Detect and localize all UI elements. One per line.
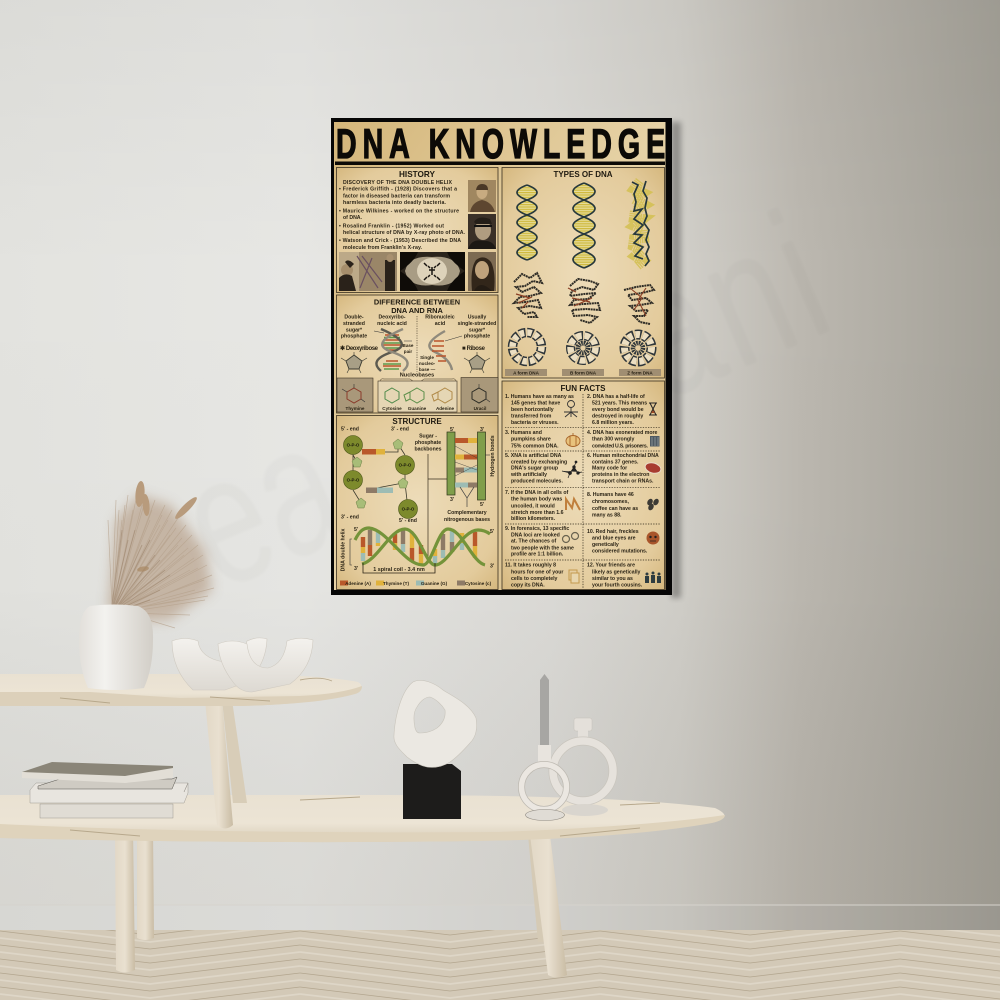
label: B form DNA <box>562 369 604 376</box>
icon: coiled DNA <box>566 499 580 510</box>
cytosine guanine adenine box <box>378 381 457 412</box>
pampas grass <box>108 481 214 628</box>
fact 11 <box>505 563 563 589</box>
fact 12: similar to you as <box>592 576 633 582</box>
fact 1 <box>505 394 574 426</box>
end labels: 5' - end <box>341 426 359 432</box>
baseboard <box>0 904 1000 931</box>
fact 1: 145 genes that have <box>511 400 560 406</box>
callout: single nucleobase: base — <box>419 367 436 372</box>
double helix label <box>340 527 494 572</box>
bases on chain <box>362 449 393 493</box>
panel: types of DNA <box>502 168 664 378</box>
phosphate circles <box>344 436 418 518</box>
fact 5: created by exchanging <box>511 459 567 465</box>
complementary base ladder: 5' <box>480 502 484 508</box>
watermark text: ani <box>599 172 859 438</box>
deoxyribose ring <box>341 352 367 373</box>
complementary base ladder: 3' <box>450 497 454 503</box>
cytosine guanine adenine box: Cytosine <box>382 406 402 411</box>
fact 10: 10. Red hair, freckles <box>587 529 639 535</box>
icon: meat <box>644 461 662 475</box>
large ring holder <box>553 718 613 816</box>
fact 12 <box>587 563 643 589</box>
DNA labels: phosphate <box>341 334 367 340</box>
fact 2 <box>587 394 647 426</box>
photo: Franklin <box>468 252 496 291</box>
title: DNA KNOWLEDGE <box>336 119 665 167</box>
title rule <box>335 162 665 165</box>
callout: single nucleobase: Single <box>420 355 434 360</box>
icon: handcuffs <box>562 532 578 542</box>
RNA labels: phosphate <box>464 334 490 340</box>
icon: virus <box>564 400 578 417</box>
fact 5: DNA's sugar group <box>511 466 558 472</box>
fact 3: 3. Humans and <box>505 430 542 436</box>
fact 1: 1. Humans have as many as <box>505 394 574 400</box>
phosphate text <box>347 443 415 512</box>
fact 9: at. The chances of <box>511 539 557 545</box>
helix: A form <box>517 185 537 260</box>
legend: Thymine (T) <box>383 581 409 586</box>
fact 12: your fourth cousins. <box>592 583 643 589</box>
helix: B form <box>573 183 595 268</box>
fact 2: 521 years. This means <box>592 400 647 406</box>
spiral coil measure <box>363 563 435 573</box>
fact 5: produced molecules. <box>511 478 563 484</box>
photo: Watson and Crick <box>339 252 397 291</box>
complementary nitrogenous bases label: Complementary <box>447 510 487 516</box>
fact 3: pumpkins share <box>511 437 551 443</box>
fact 4 <box>587 430 658 449</box>
fact 1: bacteria or viruses. <box>511 420 559 426</box>
fact 3 <box>505 430 559 449</box>
complementary base ladder: 5' <box>450 427 454 433</box>
complementary base ladder: 3' <box>480 427 484 433</box>
fact 7: the human body was <box>511 497 562 503</box>
double helix label: 5' <box>354 527 358 533</box>
label: B form DNA: B form DNA <box>570 371 597 376</box>
divider <box>416 316 418 372</box>
legend: Adenine (A) <box>345 581 371 586</box>
RNA strand diagram <box>429 331 462 370</box>
poster <box>331 118 681 598</box>
fact 10 <box>587 529 648 555</box>
double helix label: DNA double helix <box>340 529 346 571</box>
cytosine guanine adenine box: Adenine <box>436 406 455 411</box>
DNA labels: Double- <box>344 315 364 321</box>
icon: face <box>646 532 660 544</box>
heading: types of DNA: TYPES OF DNA <box>553 170 613 179</box>
upper table legs <box>205 700 247 828</box>
fact 10: genetically <box>592 542 619 548</box>
sugar-phosphate backbones label <box>414 434 442 452</box>
small ring holder <box>522 745 566 820</box>
RNA labels: single-stranded <box>458 321 496 327</box>
sugar-phosphate backbones label: Sugar - <box>419 434 437 440</box>
history text block: harmless bacteria into deadly bacteria. <box>343 200 447 206</box>
DNA labels: Deoxyribo- <box>378 315 406 321</box>
double helix label: 3' <box>490 564 494 570</box>
fact 12: 12. Your friends are <box>587 563 635 569</box>
hydrogen bonds label <box>485 435 496 477</box>
fact 6: proteins in the electron <box>592 472 649 478</box>
uracil box <box>461 378 498 412</box>
fact 11: 11. It takes roughly 8 <box>505 563 556 569</box>
dotted dividers <box>505 394 661 589</box>
fact 6: Many code for <box>592 466 627 472</box>
end labels: 3' - end <box>391 426 409 432</box>
top view ring: B form <box>570 336 596 360</box>
DNA labels: stranded <box>343 321 365 327</box>
heading: nucleobases <box>380 372 456 384</box>
uracil box: Uracil <box>474 406 486 411</box>
callout: base pair <box>403 343 414 354</box>
DNA helix diagram <box>374 329 412 371</box>
history text block: • Rosalind Franklin - (1952) Worked out <box>339 223 444 229</box>
label: Z form DNA <box>619 369 661 376</box>
fact 7 <box>505 490 568 522</box>
RNA labels: Ribonucleic <box>425 315 455 321</box>
callout: single nucleobase <box>419 355 436 372</box>
label: deoxyribose: ✱ Deoxyribose <box>340 345 379 352</box>
heading: history: HISTORY <box>399 170 436 179</box>
cytosine guanine adenine box: Guanine <box>408 406 427 411</box>
legend <box>340 580 492 586</box>
icon: paper <box>569 570 579 583</box>
fact 11: hours for one of your <box>511 569 563 575</box>
atom model: A form <box>514 273 542 317</box>
fact 5: with artificially <box>510 472 547 478</box>
history text block <box>339 180 466 251</box>
end labels: 3' - end <box>341 514 359 520</box>
phosphate text: O-P-O <box>399 463 412 468</box>
double helix label: 3' <box>354 566 358 572</box>
fact 9: two people with the same <box>511 545 574 551</box>
end labels <box>341 426 417 524</box>
end labels: 5' - end <box>399 518 417 524</box>
fact 1: transferred from <box>511 414 552 420</box>
stack of books <box>22 762 188 818</box>
fact 7: 7. If the DNA in all cells of <box>505 490 568 496</box>
strands <box>355 528 490 565</box>
sugar pentagons <box>352 439 408 508</box>
fact 8: coffee can have as <box>592 506 638 512</box>
helix: Z form <box>632 181 649 266</box>
fact 2: destroyed in roughly <box>592 414 643 420</box>
spiral coil measure: 1 spiral coil - 3.4 nm <box>373 567 425 573</box>
panel: structure <box>336 416 498 590</box>
complementary nitrogenous bases label <box>444 487 490 523</box>
RNA labels: sugar* <box>469 328 486 334</box>
history text block: of DNA. <box>343 215 363 221</box>
nucleotide chain diagram <box>344 436 418 518</box>
history text block: factor in diseased bacteria can transform <box>343 193 450 199</box>
history text block: molecule from Franklin's X-ray. <box>343 245 423 251</box>
panel: history <box>336 168 498 292</box>
fact 4: than 300 wrongly <box>592 437 634 443</box>
sugar-phosphate backbones label: backbones <box>414 446 442 452</box>
callout: base pair: pair <box>404 349 412 354</box>
herringbone floor <box>0 930 1000 1000</box>
history text block: helical structure of DNA by X-ray photo of DNA. <box>343 230 466 236</box>
photo: X-ray diffraction <box>400 252 465 291</box>
heading: fun facts: FUN FACTS <box>561 384 606 393</box>
poster paper <box>334 122 666 590</box>
RNA labels: acid <box>435 321 445 327</box>
thymine box: Thymine <box>346 406 365 411</box>
fact 10: considered mutations. <box>592 549 648 555</box>
hydrogen bonds label: Hydrogen bonds <box>490 435 496 477</box>
complementary nitrogenous bases label: nitrogenous bases <box>444 517 490 523</box>
lower table top <box>0 795 725 842</box>
callout: base pair: Base <box>403 343 414 348</box>
label: A form DNA: A form DNA <box>513 371 540 376</box>
fact 7: stretch more than 1.6 <box>511 510 564 516</box>
heading: difference: DNA AND RNA <box>391 306 443 315</box>
thymine box <box>337 378 373 412</box>
ribose ring <box>464 352 490 373</box>
panel: fun facts <box>502 381 664 590</box>
fact 4: 4. DNA has exonerated more <box>587 430 658 436</box>
fact 4: convicted U.S. prisoners. <box>592 443 649 449</box>
phosphate text: O-P-O <box>402 507 415 512</box>
fact 12: likely as genetically <box>592 569 641 575</box>
phosphate text: O-P-O <box>347 478 360 483</box>
upper table top <box>0 674 362 706</box>
fact 9: DNA loci are looked <box>511 532 560 538</box>
heading: difference: DIFFERENCE BETWEEN <box>374 298 460 306</box>
watermark text: ea <box>153 381 370 629</box>
history text block: • Maurice Wilkines - worked on the structure <box>339 208 459 214</box>
fact 6: 6. Human mitochondrial DNA <box>587 453 659 459</box>
atom model: B form <box>568 279 600 323</box>
RNA labels <box>425 315 496 340</box>
icon: molecule <box>562 461 582 478</box>
fact 9 <box>505 526 574 558</box>
fact 6: contains 37 genes. <box>592 459 639 465</box>
history text block: • Watson and Crick - (1953) Described the DNA <box>339 238 461 244</box>
history text block: DISCOVERY OF THE DNA DOUBLE HELIX <box>343 180 453 186</box>
bowl: front U shape <box>218 638 313 692</box>
fact 8: many as 88. <box>592 513 622 519</box>
fact 9: profile are 1:1 billion. <box>511 552 564 558</box>
panel: difference between DNA and RNA <box>336 295 498 413</box>
fact 5 <box>505 453 567 484</box>
fact 10: and blue eyes are <box>592 535 636 541</box>
icon: coffee beans <box>646 498 660 511</box>
black cube <box>403 764 461 819</box>
atom model: Z form <box>624 285 654 324</box>
fact 11: cells to completely <box>511 576 558 582</box>
fact 6: transport chain or RNAs. <box>592 478 654 484</box>
icon: pumpkin <box>566 433 580 446</box>
legend: Cytosine (c) <box>465 581 492 586</box>
fact 7: billion kilometers. <box>511 516 556 522</box>
RNA labels: Usually <box>468 315 486 321</box>
label: ribose: ■ Ribose <box>462 346 486 352</box>
candle <box>540 674 549 745</box>
label: Z form DNA: Z form DNA <box>627 371 653 376</box>
fact 3: 75% common DNA. <box>511 443 559 449</box>
icon: hourglass <box>649 403 657 415</box>
top view ring: A form <box>512 332 542 362</box>
watermark text <box>153 172 859 629</box>
DNA labels: sugar* <box>346 328 363 334</box>
heading: nucleobases: Nucleobases <box>400 372 434 378</box>
DNA labels <box>341 315 407 340</box>
fact 6 <box>587 453 659 484</box>
poster shadow <box>671 122 681 598</box>
fact 11: copy its DNA. <box>511 583 545 589</box>
fact 8 <box>587 492 638 519</box>
fact 2: every bond would be <box>592 407 644 413</box>
heading: difference <box>374 298 460 315</box>
backbone pointer lines <box>428 454 448 559</box>
complementary base ladder <box>447 427 486 508</box>
sculpture <box>394 680 477 767</box>
label: A form DNA <box>505 369 547 376</box>
history text block: • Frederick Griffith - (1928) Discovers that a <box>339 186 457 192</box>
legend: Guanine (G) <box>421 581 448 586</box>
DNA labels: nucleic acid <box>377 321 407 327</box>
bowl: back U shape <box>172 638 267 690</box>
fact 2: 2. DNA has a half-life of <box>587 394 645 400</box>
fact 2: 6.8 million years. <box>592 420 634 426</box>
vase <box>79 604 153 690</box>
double helix label: 5' <box>490 529 494 535</box>
fact 5: 5. XNA is artificial DNA <box>505 453 562 459</box>
fact 7: uncoiled, it would <box>511 503 555 509</box>
top view ring: Z form <box>624 334 652 362</box>
lower table legs <box>115 830 567 978</box>
phosphate text: O-P-O <box>347 443 360 448</box>
icon: prison <box>650 436 660 446</box>
fact 8: chromosomes, <box>592 499 629 505</box>
callout: single nucleobase: nucleo- <box>419 361 436 366</box>
photo: Wilkins <box>468 214 496 249</box>
double helix diagram <box>355 528 490 565</box>
fact 8: 8. Humans have 46 <box>587 492 634 498</box>
fact 1: been horizontally <box>511 407 554 413</box>
photo: Griffith <box>468 180 496 212</box>
pampas plumes <box>134 481 199 521</box>
heading: structure: STRUCTURE <box>392 417 442 426</box>
fact 9: 9. In forensics, 13 specific <box>505 526 569 532</box>
poster frame <box>331 118 672 595</box>
icon: people <box>645 572 661 583</box>
sugar-phosphate backbones label: phosphate <box>415 440 441 446</box>
rungs <box>363 530 475 564</box>
